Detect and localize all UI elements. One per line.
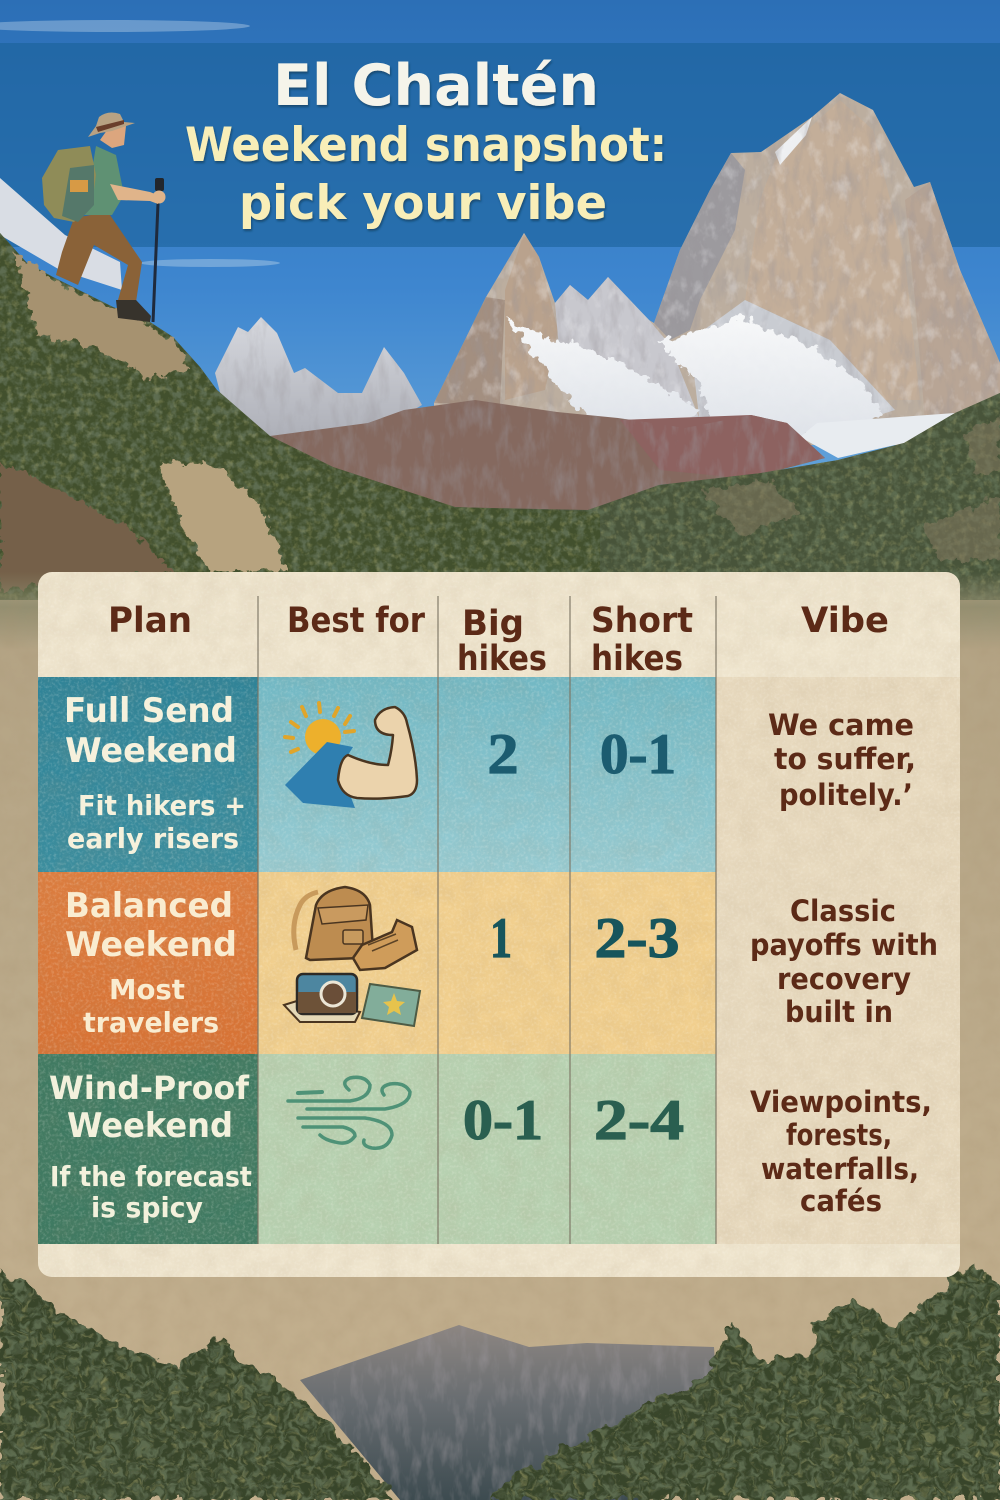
row: Balanced Weekend fills	[38, 872, 716, 1054]
title banner	[0, 43, 1000, 247]
vibe column fills	[716, 677, 960, 1244]
counts: Big hikes and Short hikes: 2-3	[594, 907, 680, 970]
plan: Full Send Weekend	[64, 691, 246, 855]
mountains: left peaks	[215, 317, 422, 436]
plan: Balanced Weekend: Balanced	[65, 886, 233, 926]
vibe: Wind-Proof: waterfalls,	[761, 1152, 919, 1186]
row: Wind-Proof Weekend fills	[38, 1054, 716, 1244]
hiker illustration	[42, 113, 166, 322]
icon: wind gusts	[288, 1077, 410, 1148]
paper background	[0, 650, 1000, 1500]
counts: Big hikes and Short hikes: 0-1	[463, 1089, 543, 1152]
vibe: Full Send: politely.’	[779, 778, 913, 812]
table card	[38, 572, 960, 1277]
vibe: Full Send: to suffer,	[774, 742, 916, 776]
vibe: Balanced: payoffs with	[750, 928, 938, 962]
paper texture	[0, 600, 1000, 1500]
column dividers	[258, 596, 716, 1244]
header row: hikes	[591, 639, 683, 679]
plan: Wind-Proof Weekend: is spicy	[91, 1191, 203, 1224]
row: Full Send Weekend fills	[38, 677, 716, 872]
vibe: Wind-Proof	[750, 1085, 932, 1218]
vibe: Wind-Proof: forests,	[786, 1118, 892, 1152]
vibe: Full Send: We came	[768, 708, 914, 742]
bottom right trees	[490, 1255, 1000, 1500]
header row: hikes	[457, 639, 547, 679]
header row: Short	[591, 601, 693, 641]
plan: Wind-Proof Weekend: If the forecast	[50, 1160, 252, 1193]
vibe: Balanced: built in	[785, 995, 893, 1029]
plan: Balanced Weekend: Most	[109, 973, 185, 1006]
plan: Wind-Proof Weekend: Wind-Proof	[49, 1069, 250, 1107]
counts: Big hikes and Short hikes: 2-4	[594, 1089, 684, 1152]
icon: sun and flexed arm	[285, 703, 417, 808]
vibe: Balanced: recovery	[777, 962, 911, 996]
vibe: Wind-Proof: cafés	[800, 1184, 882, 1218]
plan: Balanced Weekend: travelers	[83, 1006, 219, 1039]
subtitle	[185, 118, 667, 231]
plan: Full Send Weekend: Fit hikers +	[78, 789, 246, 822]
header row: Vibe	[801, 601, 889, 641]
plan: Wind-Proof Weekend: Weekend	[67, 1106, 233, 1146]
vibe: Balanced	[750, 894, 938, 1029]
counts: Big hikes and Short hikes: 2	[488, 723, 518, 786]
plan: Balanced Weekend	[65, 886, 237, 1039]
header row: Plan	[108, 601, 192, 641]
card texture	[38, 572, 960, 1277]
vibe: Full Send	[768, 708, 916, 812]
plan: Full Send Weekend: early risers	[67, 822, 239, 855]
plan: Wind-Proof Weekend	[49, 1069, 252, 1224]
plan: Balanced Weekend: Weekend	[65, 925, 237, 965]
header row	[108, 601, 889, 679]
plan: Full Send Weekend: Weekend	[65, 731, 237, 771]
left rocky hillside	[0, 220, 600, 600]
subtitle: Weekend snapshot:	[185, 118, 667, 173]
foothills	[270, 400, 830, 515]
plan: Full Send Weekend: Full Send	[64, 691, 234, 731]
bottom distant mountain	[300, 1320, 720, 1500]
header row: Big	[462, 604, 524, 644]
right forested slope	[430, 390, 1000, 600]
snow slope behind hiker	[0, 178, 122, 290]
vibe: Wind-Proof: Viewpoints,	[750, 1085, 932, 1119]
icon: backpack, shoes, camera, map	[284, 887, 420, 1026]
header row: Best for	[287, 601, 426, 641]
counts: Big hikes and Short hikes: 0-1	[600, 723, 676, 786]
landscape fade into paper	[0, 572, 1000, 650]
mountains: Fitz Roy massif	[434, 90, 1000, 458]
cloud streaks	[0, 20, 280, 267]
bottom left trees	[0, 1260, 400, 1500]
sky background	[0, 0, 1000, 520]
counts: Big hikes and Short hikes: 1	[490, 907, 512, 970]
title: El Chaltén: El Chaltén	[273, 53, 599, 119]
vibe: Balanced: Classic	[790, 894, 896, 928]
subtitle: pick your vibe	[239, 176, 607, 231]
counts: Big hikes and Short hikes	[463, 723, 684, 1152]
card light flecks	[38, 572, 960, 1277]
